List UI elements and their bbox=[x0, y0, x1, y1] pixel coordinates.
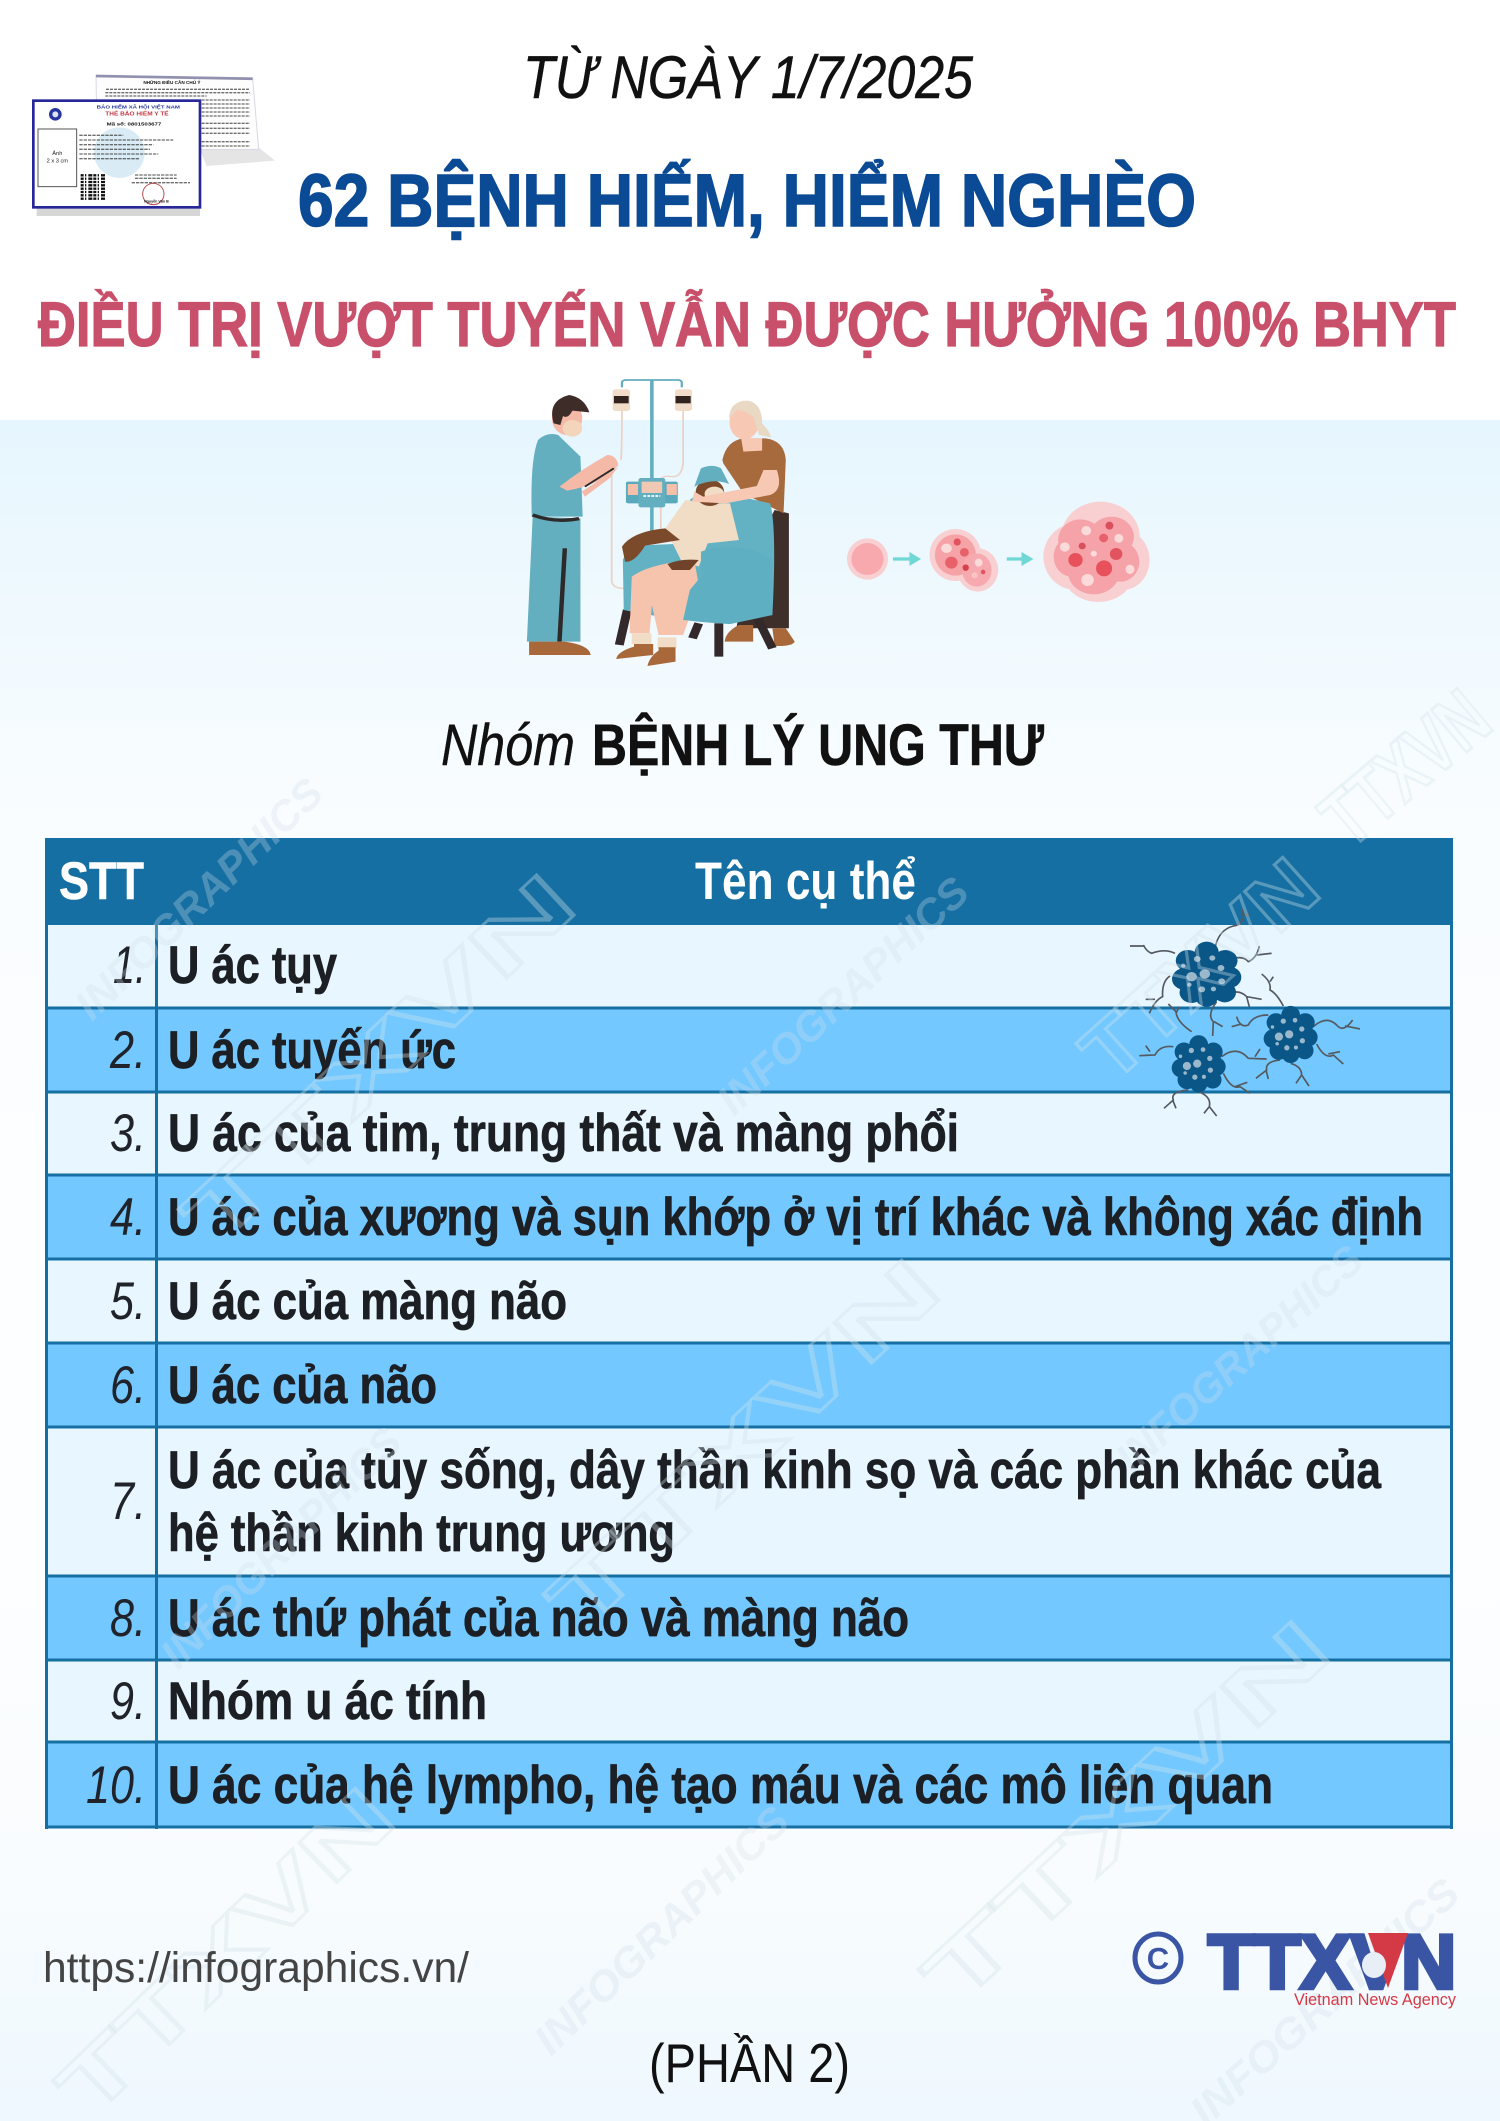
row 4: 4. bbox=[110, 1188, 146, 1247]
row 9: Nhóm u ác tính bbox=[168, 1672, 487, 1731]
table header: Tên cụ thể bbox=[695, 852, 916, 911]
section heading bbox=[441, 713, 1045, 778]
card back: NHỮNG ĐIỀU CẦN CHÚ Ý bbox=[143, 79, 201, 85]
card front: BẢO HIỂM XÃ HỘI VIỆT NAM bbox=[97, 103, 180, 111]
source url: https://infographics.vn/ bbox=[43, 1944, 469, 1992]
row 1: U ác tụy bbox=[168, 936, 337, 995]
table header: STT bbox=[59, 852, 144, 911]
doctor bbox=[527, 395, 618, 655]
watermarks: INFOGRAPHICS bbox=[708, 868, 978, 1124]
row 7: hệ thần kinh trung ương bbox=[168, 1504, 675, 1563]
watermarks bbox=[40, 673, 1500, 2121]
watermarks: INFOGRAPHICS bbox=[525, 1797, 798, 2063]
armchair bbox=[619, 493, 774, 657]
armchair front arm bbox=[683, 547, 772, 624]
row 8: U ác thứ phát của não và màng não bbox=[168, 1589, 909, 1648]
infusion pole bbox=[612, 380, 692, 588]
section heading: BỆNH LÝ UNG THƯ bbox=[592, 713, 1045, 778]
row 10: 10. bbox=[86, 1756, 146, 1815]
row 3: U ác của tim, trung thất và màng phổi bbox=[168, 1104, 959, 1163]
watermarks: TTXVN bbox=[1064, 841, 1335, 1098]
patient bbox=[616, 466, 739, 666]
row 1: 1. bbox=[113, 936, 146, 995]
row 2: 2. bbox=[109, 1021, 146, 1080]
row 2: U ác tuyến ức bbox=[168, 1021, 456, 1080]
title: 62 BỆNH HIẾM, HIỂM NGHÈO bbox=[298, 159, 1196, 242]
icon: health insurance card bbox=[33, 75, 275, 216]
copyright mark: C bbox=[1147, 1941, 1169, 1976]
illustration: chemotherapy patient with doctor and caregiver bbox=[527, 380, 1150, 666]
card front: 2 x 3 cm bbox=[47, 158, 68, 164]
row 5: 5. bbox=[110, 1272, 146, 1331]
row backgrounds bbox=[45, 924, 1453, 1829]
cell stage 1 bbox=[847, 538, 888, 580]
section heading: Nhóm bbox=[441, 713, 575, 778]
caregiver body bbox=[722, 401, 795, 646]
icon: tumour cells bbox=[1130, 908, 1360, 1116]
row 1 bbox=[113, 936, 337, 995]
watermarks: TTXVN bbox=[906, 1603, 1347, 2022]
row 8: 8. bbox=[110, 1589, 146, 1648]
card front bbox=[33, 101, 200, 207]
card front: Ảnh bbox=[52, 150, 62, 157]
logo: TTXVN: TTXVN bbox=[1208, 1920, 1456, 2005]
card front: Nguyễn Văn B bbox=[144, 200, 169, 204]
part label: (PHẦN 2) bbox=[649, 2032, 850, 2094]
row 5: U ác của màng não bbox=[168, 1272, 567, 1331]
arrow bbox=[1007, 552, 1034, 566]
row 9: 9. bbox=[110, 1672, 146, 1731]
row 3: 3. bbox=[110, 1104, 146, 1163]
row 6 bbox=[110, 1356, 437, 1415]
watermarks: INFOGRAPHICS bbox=[1107, 1236, 1372, 1482]
row 6: U ác của não bbox=[168, 1356, 437, 1415]
caregiver arm bbox=[692, 470, 779, 503]
row 7 bbox=[110, 1441, 1381, 1563]
table bbox=[45, 838, 1453, 1829]
row 10: U ác của hệ lympho, hệ tạo máu và các mô liên quan bbox=[168, 1756, 1273, 1815]
watermarks: INFOGRAPHICS bbox=[66, 769, 332, 1028]
date line: TỪ NGÀY 1/7/2025 bbox=[523, 44, 974, 111]
copyright mark bbox=[1135, 1934, 1181, 1982]
watermarks: INFOGRAPHICS bbox=[151, 1418, 411, 1677]
card front: THẺ BẢO HIỂM Y TẾ bbox=[105, 111, 169, 118]
cell stage 2 bbox=[930, 529, 998, 592]
cell stage 3 bbox=[1043, 502, 1150, 602]
table header bbox=[45, 838, 1453, 925]
logo: TTXVN: Vietnam News Agency bbox=[1294, 1990, 1456, 2009]
arrow bbox=[893, 552, 921, 566]
row 7: 7. bbox=[110, 1472, 146, 1531]
row 6: 6. bbox=[110, 1356, 146, 1415]
card front: Mã số: 0801503677 bbox=[107, 121, 162, 128]
card shadow bbox=[37, 208, 200, 216]
watermarks: TTXVN bbox=[531, 1241, 957, 1647]
card back bbox=[96, 75, 275, 166]
watermarks: TTXVN bbox=[166, 856, 592, 1262]
